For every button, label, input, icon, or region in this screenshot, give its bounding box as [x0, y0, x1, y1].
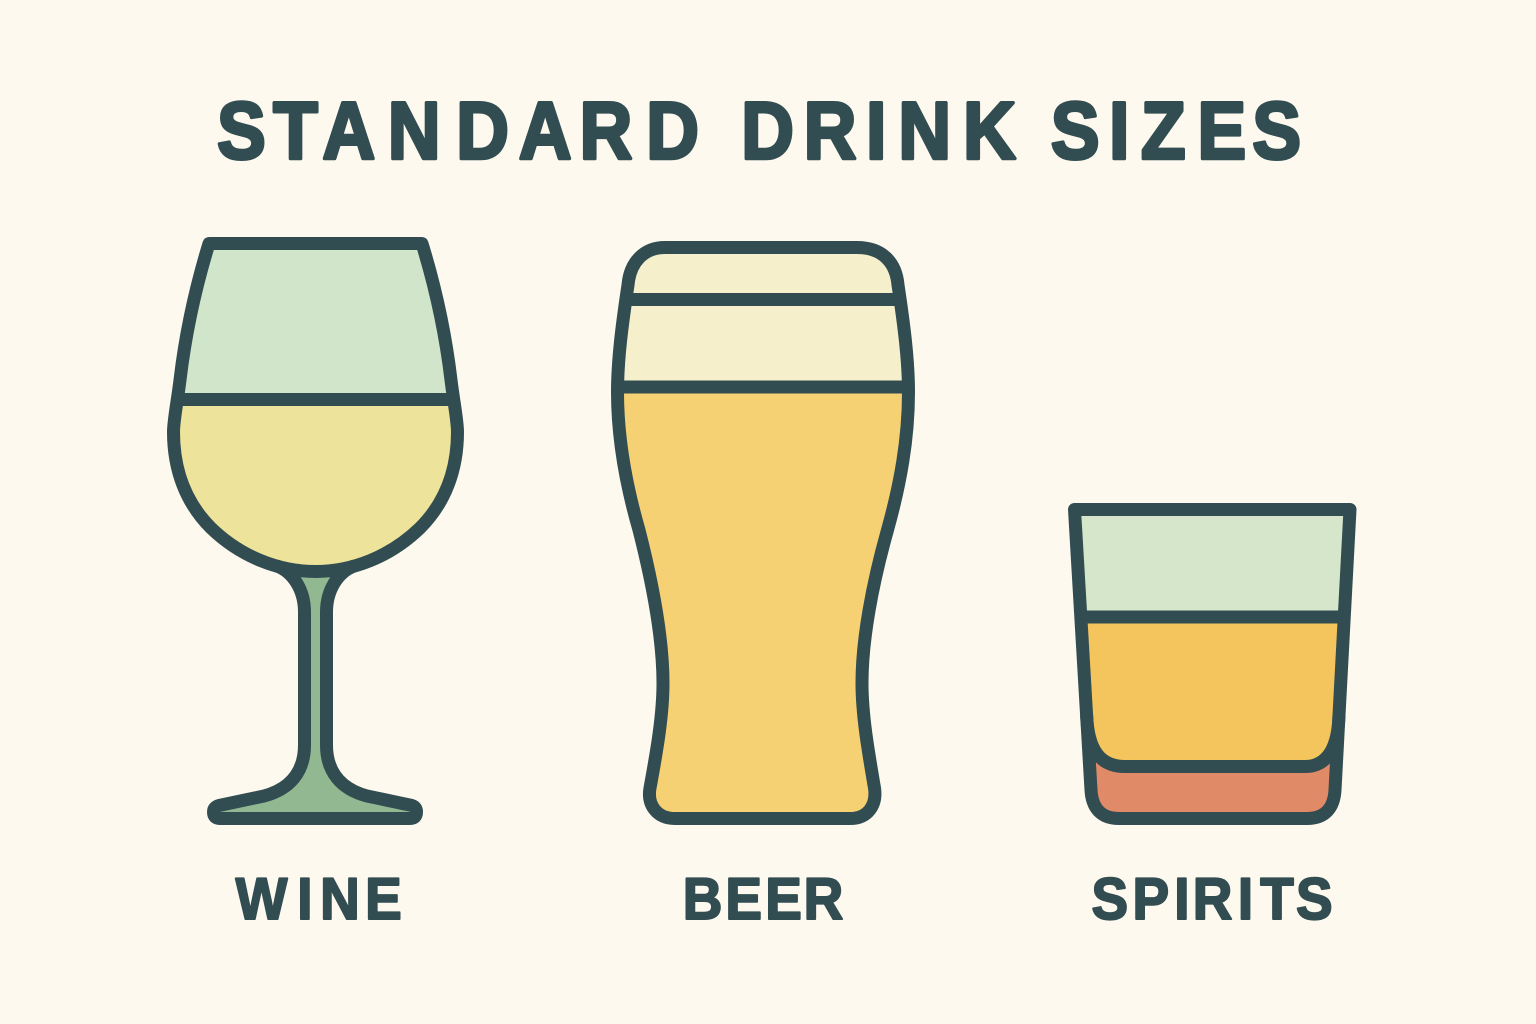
beer level line: [618, 380, 908, 394]
icon: beer glass: [618, 248, 908, 818]
spirit fill: [1080, 617, 1345, 770]
white wine fill: [174, 400, 458, 572]
stem and foot fill: [214, 566, 416, 818]
stem and foot outline: [214, 566, 416, 818]
label: spirits: SPIRITS: [1092, 866, 1333, 932]
label: wine: WINE: [236, 866, 402, 932]
glass outline: [618, 248, 908, 818]
base fill: [1087, 715, 1339, 818]
empty bowl fill: [177, 244, 454, 400]
wine level line: [177, 393, 454, 406]
foam top line: [627, 293, 899, 306]
title: STANDARD DRINK SIZES: [217, 86, 1301, 176]
inner base curve: [1087, 715, 1339, 766]
bowl outline: [174, 244, 458, 572]
spirit level line: [1080, 610, 1345, 624]
empty glass fill: [1074, 510, 1350, 620]
icon: wine glass: [174, 244, 458, 818]
label: beer: BEER: [683, 866, 843, 932]
glass outline: [1074, 510, 1350, 818]
beer fill: [618, 248, 908, 818]
foam fill: [618, 248, 908, 387]
icon: spirits glass: [1074, 510, 1350, 818]
